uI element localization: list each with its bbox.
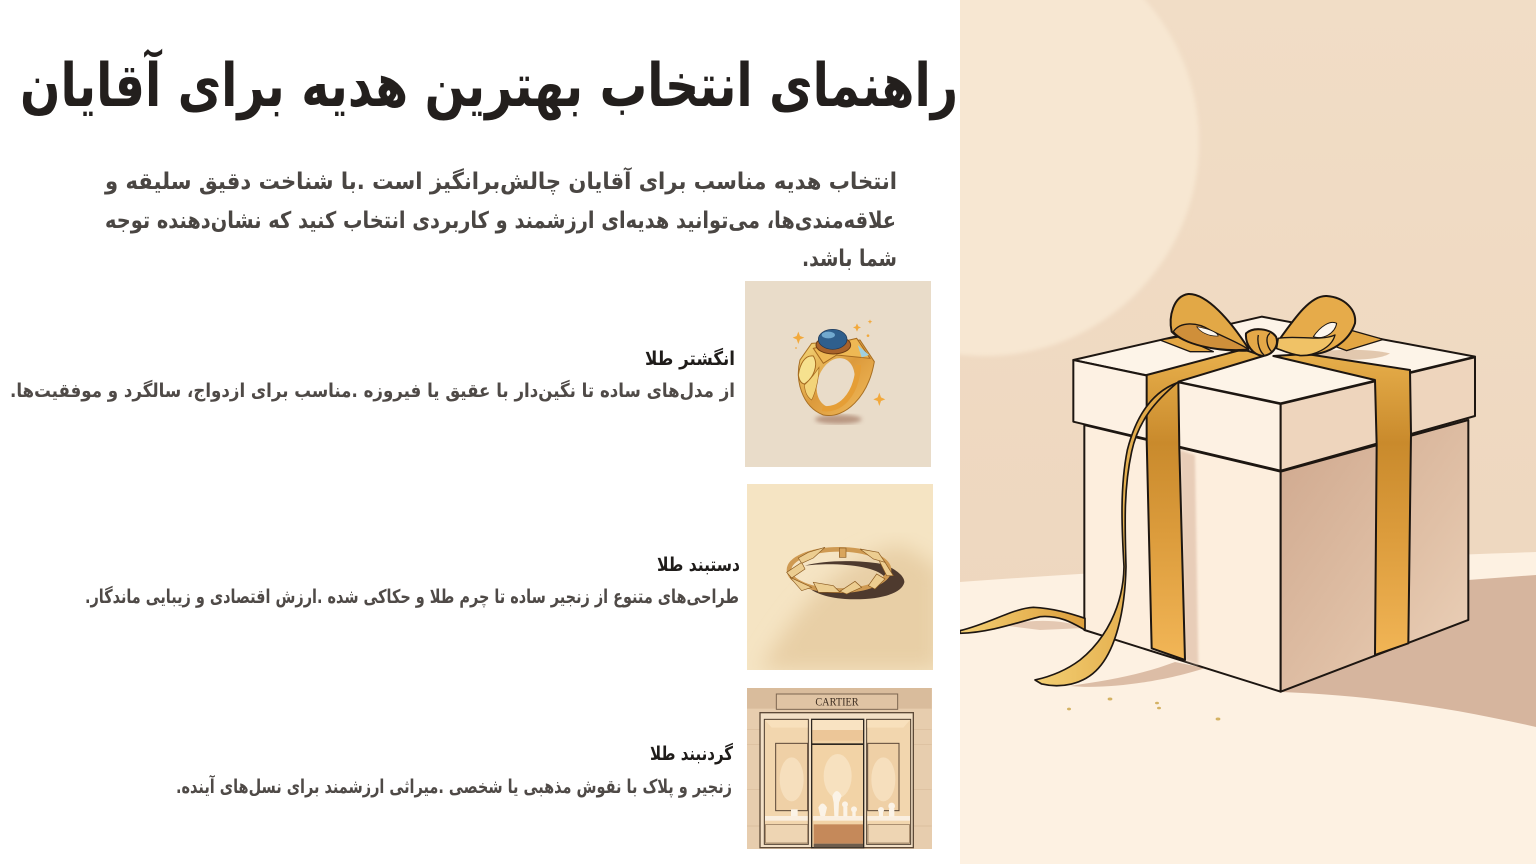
intro paragraph [104,166,897,272]
title: راهنمای انتخاب بهترین هدیه برای آقایان [20,48,958,121]
box shadow on floor [1281,575,1536,727]
right window [867,719,911,844]
jewellery busts [791,791,895,817]
lid top [1073,317,1475,403]
jewellery storefront image [747,688,932,849]
display bases [765,816,808,821]
left ribbon band [1147,349,1263,660]
panel: gift illustration [960,0,1536,864]
intro paragraph: شما باشد. [802,246,897,272]
shadow beside ribbon [1180,450,1198,665]
bracelet image [747,484,940,670]
box right face [1281,420,1468,692]
lid right face [1281,357,1475,471]
bracelet heading: دستبند طلا [657,554,740,576]
gift box [960,294,1475,692]
card: gold bracelet [85,484,940,670]
bracelet shadow [805,561,904,599]
bow shadow on lid [1318,350,1390,360]
left trailing ribbon [960,607,1085,633]
intro paragraph: علاقه‌مندی‌ها، می‌توانید هدیه‌ای ارزشمند و کاربردی انتخاب کنید که نشان‌دهنده توجه [105,208,896,234]
hanging ribbon tail [1035,383,1177,686]
centre door [812,719,864,848]
ring image [745,281,931,467]
ring heading: انگشتر طلا [645,347,735,370]
right ribbon band [1273,354,1411,655]
card: gold ring [10,281,931,467]
gold confetti dots [1067,698,1220,720]
light circle on wall [960,0,1198,356]
ribbon shadow on floor [1070,662,1205,687]
bow [1171,294,1355,356]
necklace heading: گردنبند طلا [650,742,734,765]
bracelet band [789,549,889,591]
right bow loop [1277,296,1355,355]
card: gold necklace [176,688,932,849]
back ribbons [1160,337,1213,352]
wall background [960,0,1536,582]
ring description: از مدل‌های ساده تا نگین‌دار با عقیق یا فیروزه .مناسب برای ازدواج، سالگرد و موفقیت‌ها. [10,379,735,402]
bracelet description: طراحی‌های متنوع از زنجیر ساده تا چرم طلا و حکاکی شده .ارزش اقتصادی و زیبایی ماندگار. [85,585,739,608]
jewellery storefront image: CARTIER [815,696,859,708]
necklace description: زنجیر و پلاک با نقوش مذهبی یا شخصی .میراثی ارزشمند برای نسل‌های آینده. [176,774,732,798]
box left face [1084,425,1281,692]
floor [960,552,1536,864]
lid left face [1073,360,1281,471]
bow knot [1246,329,1277,356]
left bow loop [1171,294,1248,351]
left window [764,719,808,844]
intro paragraph: انتخاب هدیه مناسب برای آقایان چالش‌برانگیز است .با شناخت دقیق سلیقه و [104,166,897,195]
